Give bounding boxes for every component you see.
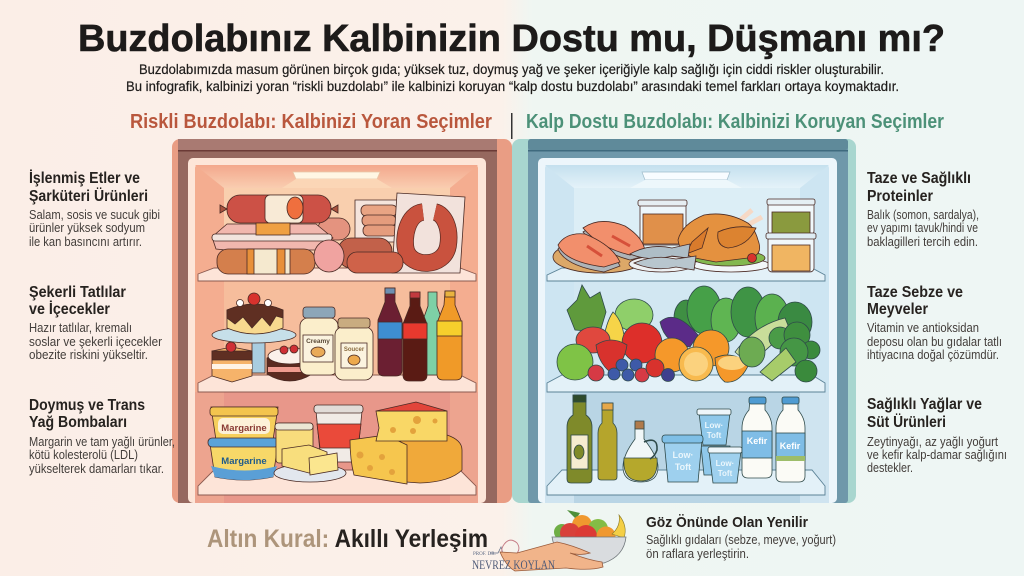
dairy: low-fat yogurt cups	[662, 409, 742, 483]
text block: saturated and trans fats: yükselterek damarları tıkar.	[29, 462, 164, 476]
sauces: creamy jar	[300, 307, 338, 375]
dairy: low-fat yogurt cups: Toft	[718, 469, 733, 478]
text block: healthy oils and dairy: Zeytinyağı, az yağlı yoğurt	[867, 435, 998, 449]
text block: saturated and trans fats: Doymuş ve Trans	[29, 397, 145, 414]
dairy: margarine tubs: Margarine	[221, 423, 267, 434]
title: Buzdolabınız Kalbinizin Dostu mu, Düşmanı mı?	[78, 18, 945, 60]
dairy: margarine tubs: Margarine	[221, 456, 267, 467]
text block: fresh proteins: Balık (somon, sardalya),	[867, 208, 979, 222]
subtitle text: Bu infografik, kalbinizi yoran “riskli buzdolabı” ile kalbinizi koruyan “kalp dostu buzdolabı” arasındaki temel farkları ortaya koymaktadır.	[126, 79, 899, 94]
text block: saturated and trans fats: Margarin ve tam yağlı ürünler,	[29, 435, 175, 449]
text block: healthy oils and dairy: destekler.	[867, 461, 913, 475]
fridge light	[642, 172, 730, 180]
text block: sugary sweets and drinks: obezite riskini yükseltir.	[29, 348, 148, 362]
drinks: soda bottles	[378, 288, 462, 381]
produce: leafy greens	[567, 285, 812, 365]
text block: processed meats: ile kan basıncını artırır.	[29, 235, 142, 249]
sweets: round cake	[267, 345, 312, 381]
icon: fruit bowl in hand	[500, 510, 626, 571]
tip text: eye level	[646, 514, 836, 561]
sauces: souçer jar	[335, 318, 373, 380]
tip text: eye level: Sağlıklı gıdaları (sebze, meyve, yoğurt)	[646, 533, 836, 547]
text block: fresh vegetables and fruit: deposu olan bu gıdalar tatlı	[867, 335, 1002, 349]
text block: healthy oils and dairy	[867, 396, 1007, 475]
produce: fruits	[557, 317, 749, 382]
heading: risky fridge: Riskli Buzdolabı: Kalbinizi Yoran Seçimler	[130, 111, 492, 133]
text block: fresh proteins: baklagilleri tercih edin.	[867, 235, 978, 249]
text block: fresh vegetables and fruit: Meyveler	[867, 301, 928, 318]
tip text: eye level: Göz Önünde Olan Yenilir	[646, 514, 808, 531]
text block: fresh vegetables and fruit: ihtiyacına doğal çözümdür.	[867, 348, 999, 362]
text block: sugary sweets and drinks: ve İçecekler	[29, 301, 110, 318]
sweets: cake stand	[212, 293, 296, 373]
text block: processed meats: İşlenmiş Etler ve	[29, 170, 140, 187]
dairy: low-fat yogurt cups: Low·	[672, 450, 694, 460]
text block: processed meats: ürünler yüksek sodyum	[29, 221, 145, 235]
logo: Nevrez Koylan: PROF. DR.	[473, 552, 496, 557]
panel: heart friendly fridge	[512, 139, 856, 503]
dairy: cup, jar and butter	[274, 405, 363, 482]
dairy: low-fat yogurt cups: Low·	[705, 421, 723, 430]
text block: fresh vegetables and fruit: Taze Sebze ve	[867, 284, 963, 301]
shelves	[547, 268, 825, 495]
protein: sardines	[629, 244, 696, 272]
logo wordmark: NEVREZ KOYLAN	[472, 557, 555, 572]
text block: healthy oils and dairy: Sağlıklı Yağlar ve	[867, 396, 982, 413]
text block: fresh proteins: Proteinler	[867, 188, 933, 205]
shelves	[198, 268, 476, 495]
sauces: creamy jar: Creamy	[306, 338, 330, 345]
text block: fresh vegetables and fruit	[867, 284, 1002, 362]
heading: heart friendly fridge: Kalp Dostu Buzdolabı: Kalbinizi Koruyan Seçimler	[526, 111, 944, 133]
subtitle text: Buzdolabımızda masum görünen birçok gıda; yüksek tuz, doymuş yağ ve şeker içeriğiyle kalp sağlığı için ciddi riskler oluşturabilir.	[139, 62, 884, 77]
text block: sugary sweets and drinks: Şekerli Tatlılar	[29, 284, 126, 301]
oils: olive oil bottles and carafe	[567, 395, 658, 483]
dairy: kefir bottles: Kefir	[780, 441, 801, 451]
sauces: souçer jar: Soucer	[344, 347, 365, 353]
meat: packaged ring sausage	[355, 193, 465, 273]
text block: fresh proteins: Taze ve Sağlıklı	[867, 170, 971, 187]
produce: broccoli	[739, 322, 820, 382]
text block: saturated and trans fats: Yağ Bombaları	[29, 414, 127, 431]
text block: processed meats	[29, 170, 160, 249]
tip text: eye level: ön raflara yerleştirin.	[646, 547, 749, 561]
dairy: cheese	[350, 402, 462, 484]
text block: fresh vegetables and fruit: Vitamin ve antioksidan	[867, 321, 979, 335]
fridge light	[293, 172, 380, 179]
subtitle text	[126, 62, 899, 94]
protein: roast chicken	[678, 210, 770, 272]
text block: processed meats: Salam, sosis ve sucuk gibi	[29, 208, 160, 222]
text block: fresh proteins	[867, 170, 979, 249]
text block: saturated and trans fats: kötü kolesterolü (LDL)	[29, 448, 138, 462]
text block: processed meats: Şarküteri Ürünleri	[29, 188, 148, 205]
text block: healthy oils and dairy: ve kefir kalp-damar sağlığını	[867, 448, 1007, 462]
text block: sugary sweets and drinks	[29, 284, 162, 362]
dairy: low-fat yogurt cups: Toft	[675, 462, 691, 472]
protein: lentil jar	[638, 200, 687, 245]
text block: healthy oils and dairy: Süt Ürünleri	[867, 414, 946, 431]
dairy: margarine tubs	[208, 407, 279, 480]
dairy: kefir bottles	[742, 397, 805, 482]
golden rule heading: Altın Kural: Akıllı Yerleşim	[207, 525, 488, 553]
protein: legume containers	[766, 199, 816, 272]
protein: salmon on board	[553, 221, 647, 273]
logo: Nevrez Koylan	[473, 540, 519, 561]
meat: salami rolls	[212, 195, 403, 274]
text block: sugary sweets and drinks: soslar ve şekerli içecekler	[29, 335, 162, 349]
dairy: kefir bottles: Kefir	[747, 436, 768, 446]
sweets: cake slice	[212, 342, 252, 382]
dairy: low-fat yogurt cups: Low·	[716, 459, 734, 468]
panel: risky fridge	[172, 139, 512, 503]
text block: sugary sweets and drinks: Hazır tatlılar, kremalı	[29, 321, 132, 335]
dairy: low-fat yogurt cups: Toft	[707, 431, 722, 440]
text block: saturated and trans fats	[29, 397, 175, 476]
text block: fresh proteins: ev yapımı tavuk/hindi ve	[867, 221, 978, 235]
